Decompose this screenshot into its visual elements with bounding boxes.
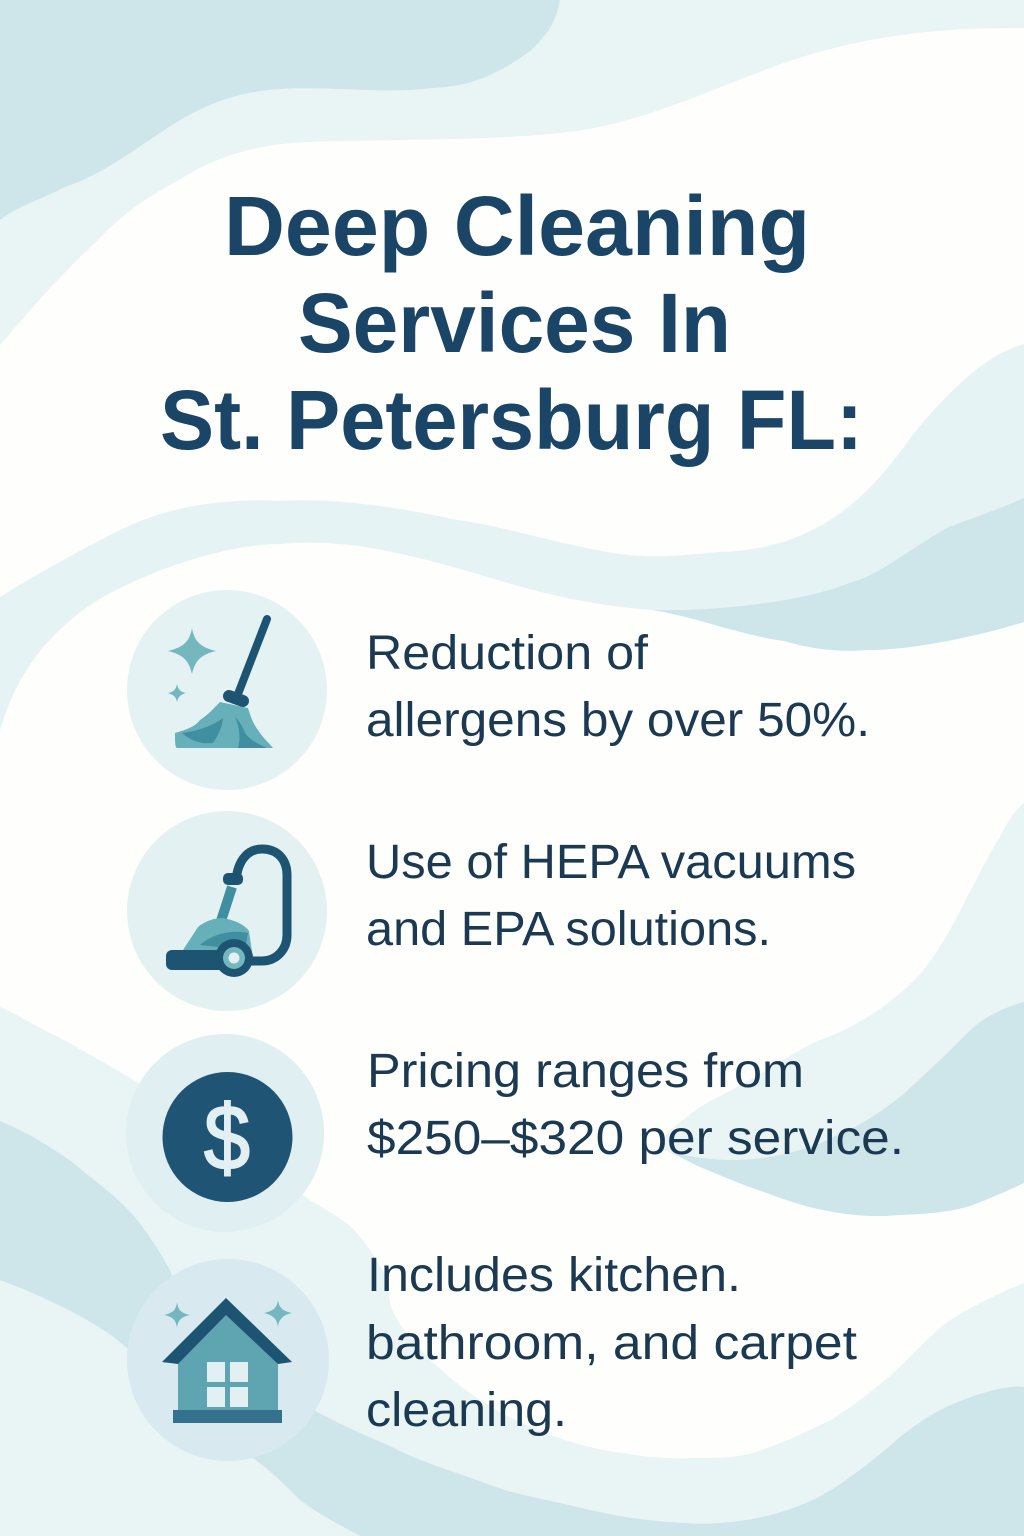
text: kitchen, bathroom and carpet: cleaning.	[366, 1384, 567, 1437]
text: pricing range: $250–$320 per service.	[367, 1112, 904, 1165]
text: kitchen, bathroom and carpet	[366, 1249, 857, 1437]
text: pricing range: Pricing ranges from	[367, 1045, 804, 1098]
text: reduction of allergens	[366, 627, 870, 747]
title: Deep Cleaning	[224, 179, 810, 273]
text: kitchen, bathroom and carpet: bathroom, and carpet	[366, 1317, 857, 1370]
text: HEPA vacuums and EPA solutions: Use of HEPA vacuums	[366, 836, 856, 889]
icon: dollar coin	[126, 1034, 324, 1232]
item 3: pricing	[126, 1034, 904, 1232]
text: HEPA vacuums and EPA solutions	[366, 836, 856, 956]
item 4: what's included	[127, 1249, 857, 1461]
text: kitchen, bathroom and carpet: Includes kitchen.	[367, 1249, 741, 1302]
item 1: allergen reduction	[127, 590, 870, 790]
text: reduction of allergens: Reduction of	[366, 627, 649, 680]
item 2: HEPA vacuums	[127, 811, 856, 1011]
icon: dollar coin: $	[204, 1087, 250, 1189]
icon: vacuum cleaner	[127, 811, 327, 1011]
title: Services In	[298, 276, 731, 370]
icon: house with sparkles	[127, 1259, 329, 1461]
text: pricing range	[367, 1045, 904, 1165]
text: HEPA vacuums and EPA solutions: and EPA solutions.	[366, 903, 771, 956]
icon: broom with sparkles	[127, 590, 327, 790]
title	[160, 179, 863, 467]
title: St. Petersburg FL:	[160, 373, 863, 467]
text: reduction of allergens: allergens by over 50%.	[366, 694, 870, 747]
